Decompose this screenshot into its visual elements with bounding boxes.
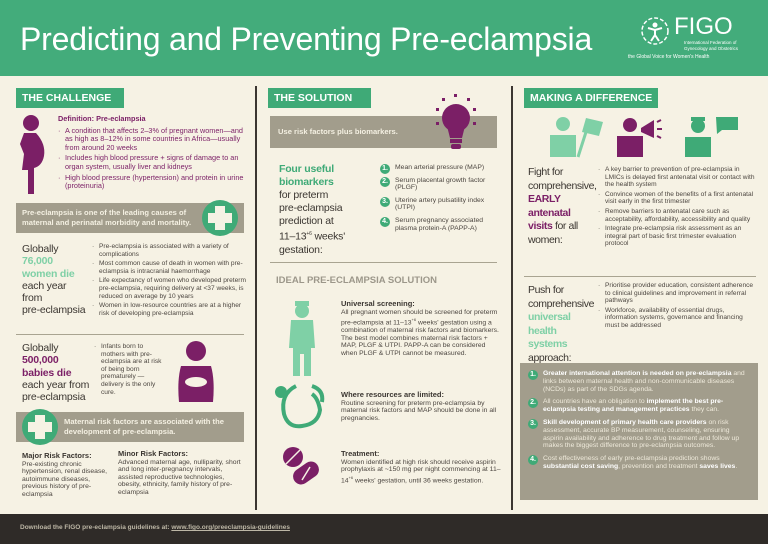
icon: lightbulb (436, 94, 476, 149)
heading: the challenge: THE CHALLENGE (22, 92, 111, 104)
title: Predicting and Preventing Pre-eclampsia (20, 21, 592, 57)
list: biomarkers: Serum pregnancy associated plasma protein-A (PAPP-A) (395, 217, 483, 232)
FIGO logo (628, 13, 738, 60)
bullets: health systems: Prioritise provider education, consistent adherence to clinical guidelines and improvement in referral pathways (605, 282, 753, 304)
heading: the solution: THE SOLUTION (274, 92, 352, 104)
definition text: Definition: Pre-eclampsia (58, 114, 146, 123)
stat: 76,000 women: each year (22, 280, 66, 292)
definition text (58, 114, 244, 190)
box: recommendations: Cost effectiveness of early pre-eclampsia prediction shows substantial cost saving, prevention and treatment saves lives. (543, 455, 737, 470)
panel: making a difference (520, 88, 758, 500)
panel: the solution (268, 88, 501, 484)
box: recommendations: Greater international attention is needed on pre-eclampsia and links between maternal health and non-communicable diseases (NCDs) as part of the SDGs agenda. (543, 370, 745, 393)
bullets: complications: Women in low-resource countries are at a higher risk of developing pre-eclampsia (99, 302, 241, 317)
icon: green cross (202, 200, 238, 236)
text: four useful biomarkers: biomarkers (279, 176, 334, 188)
definition text: A condition that affects 2–3% of pregnant women—and as high as 8–12% in some countries in Africa—usually from around 20 weeks (65, 126, 243, 152)
list: biomarkers: 4. (382, 218, 388, 225)
text: fight for early antenatal visits: women: (528, 234, 562, 246)
stat: 76,000 women: women die (22, 268, 74, 280)
box: recommendations (520, 363, 758, 500)
FIGO logo: the Global Voice for Women's Health (628, 54, 709, 60)
major risk factors: Pre-existing chronic hypertension, renal disease, autoimmune diseases, previous history of pre-eclampsia (22, 461, 107, 498)
text: four useful biomarkers: gestation: (279, 244, 323, 256)
bullets: infants: Infants born to mothers with pre-eclampsia are at risk of being born prematurely — delivery is the only cure. (101, 343, 161, 396)
list: biomarkers: 1. (382, 165, 388, 172)
bullets: antenatal: A key barrier to prevention of pre-eclampsia in LMICs is delayed first antenatal visit or contact with the health system (605, 166, 755, 188)
panel: the challenge (16, 88, 246, 498)
heading: making a difference: MAKING A DIFFERENCE (530, 92, 652, 104)
text: universal health systems: approach: (528, 352, 571, 364)
icon: pregnant woman (20, 115, 44, 194)
text: fight for early antenatal visits (528, 166, 597, 246)
stat: 500,000 babies (22, 342, 89, 403)
text: treatment: Women identified at high risk should receive aspirin prophylaxis at ~150 mg per night commencing at 11–14+6 weeks' gestation, until 36 weeks gestation. (341, 459, 501, 484)
callout band: leading causes (16, 203, 244, 233)
heading: the challenge (16, 88, 124, 108)
text: four useful biomarkers: prediction at (279, 215, 334, 227)
text: fight for early antenatal visits: Fight for (528, 166, 563, 178)
bullets: antenatal: Convince women of the benefits of a first antenatal visit early in the first trimester (605, 191, 753, 205)
text: four useful biomarkers: 11–13+6 weeks' (279, 230, 345, 242)
stat: 76,000 women (22, 243, 86, 316)
header banner (0, 0, 768, 76)
text: universal screening: Universal screening: (341, 299, 415, 308)
icon: mother with baby (178, 341, 214, 402)
icon: stethoscope (275, 384, 324, 428)
text: universal health systems: health (528, 324, 557, 336)
heading: ideal solution: IDEAL PRE-ECLAMPSIA SOLUTION (276, 275, 437, 286)
list: biomarkers: 2. (382, 178, 388, 185)
text: four useful biomarkers: Four useful (279, 163, 334, 175)
FIGO logo: FIGO (674, 13, 733, 40)
text: where resources are limited (341, 390, 496, 422)
stat: 500,000 babies: pre-eclampsia (22, 391, 85, 403)
bullets: antenatal: Integrate pre-eclampsia risk assessment as an integral part of basic first trimester evaluation protocol (605, 225, 741, 247)
callout band: maternal risk factors: Maternal risk factors are associated with the development of pre-eclampsia. (64, 417, 224, 436)
bullets: complications (92, 243, 246, 317)
heading: the solution (268, 88, 371, 108)
text: universal health systems: universal (528, 311, 571, 323)
stat: 500,000 babies: 500,000 (22, 354, 59, 366)
list: biomarkers (380, 164, 486, 232)
bullets: health systems: Workforce, availability of essential drugs, information systems, governance and financing must be addressed (605, 307, 743, 329)
text: fight for early antenatal visits: comprehensive, (528, 180, 597, 192)
callout band: maternal risk factors (16, 412, 244, 442)
band: risk factors plus biomarkers (270, 116, 497, 148)
stat: 500,000 babies: each year from (22, 379, 89, 391)
text: universal health systems: systems (528, 338, 567, 350)
list: biomarkers: 3. (382, 198, 388, 205)
box: recommendations: Skill development of primary health care providers on risk assessment, accurate BP measurement, counseling, ensuring aspirin availability and adherence to drug treatment and follow up makes the biggest difference to pre-eclampsia outcomes. (543, 419, 739, 449)
minor risk factors: Advanced maternal age, nulliparity, short and long inter-pregnancy intervals, assisted reproductive technologies, obesity, ethnicity, family history of pre-eclampsia (118, 459, 241, 496)
definition text: High blood pressure (hypertension) and protein in urine (proteinuria) (65, 173, 243, 190)
footer (0, 514, 768, 544)
definition text: Includes high blood pressure + signs of damage to an organ system, usually liver and kidneys (65, 153, 238, 171)
text: fight for early antenatal visits: EARLY (528, 193, 561, 205)
text: treatment: Treatment: (341, 449, 379, 458)
list: biomarkers: Mean arterial pressure (MAP) (395, 164, 484, 171)
bullets: antenatal: Remove barriers to antenatal care such as acceptability, affordability, accessibility and quality (605, 208, 750, 223)
box: recommendations: 1. (530, 371, 536, 378)
stat: 76,000 women: 76,000 (22, 255, 53, 267)
icon: green cross 2 (22, 409, 58, 445)
stat: 76,000 women: from (22, 292, 42, 304)
stat: 500,000 babies: babies die (22, 367, 71, 379)
heading: making a difference (524, 88, 658, 108)
minor risk factors: Minor Risk Factors: (118, 449, 188, 458)
callout band: leading causes: Pre-eclampsia is one of the leading causes of maternal and perinatal morbidity and mortality. (22, 208, 191, 227)
major risk factors: Major Risk Factors: (22, 451, 92, 460)
icon: pills (283, 447, 319, 484)
icon: health worker (289, 301, 315, 376)
text: four useful biomarkers: pre-eclampsia (279, 202, 342, 214)
text: fight for early antenatal visits: antenatal (528, 206, 570, 218)
bullets: complications: Most common cause of death in women with pre-eclampsia is intracranial haemorrhage (99, 260, 243, 275)
text: universal health systems (528, 284, 594, 364)
list: biomarkers: Serum placental growth factor (PLGF) (395, 177, 485, 191)
list: biomarkers: Uterine artery pulsatility index (UTPI) (395, 197, 484, 211)
footer text: Download the FIGO pre-eclampsia guidelines at: www.figo.org/preeclampsia-guidelines (20, 524, 290, 531)
band: risk factors plus biomarkers: Use risk factors plus biomarkers. (278, 127, 398, 136)
stat: 76,000 women: pre-eclampsia (22, 304, 85, 316)
text: where resources are limited: Routine screening for preterm pre-eclampsia by maternal risk factors and MAP should be done in all pregnancies. (341, 400, 496, 422)
bullets: complications: Life expectancy of women who developed preterm pre-eclampsia, requiring delivery at <37 weeks, is reduced on average by 10 years (99, 277, 246, 300)
text: universal health systems: Push for (528, 284, 564, 296)
bullets: antenatal (598, 166, 755, 247)
FIGO logo: International Federation of Gynecology and Obstetrics (684, 40, 738, 50)
text: four useful biomarkers: for preterm (279, 189, 328, 201)
bullets: health systems (598, 282, 753, 329)
text: universal screening: All pregnant women should be screened for preterm pre-eclampsia at 11–13+6 weeks' gestation using a combination of maternal risk factors and biomarkers. The best model combines maternal risk factors + MAP, PLGF & UTPI. PAPP-A can be considered when PLGF & UTPI cannot be measured. (341, 309, 499, 357)
bullets: complications: Pre-eclampsia is associated with a variety of complications (99, 243, 229, 258)
box: recommendations: 4. (530, 456, 536, 463)
icons: advocacy people (550, 117, 738, 158)
box: recommendations: All countries have an obligation to implement the best pre-eclampsia testing and management practices they can. (543, 398, 723, 413)
text: where resources are limited: Where resources are limited: (341, 390, 444, 399)
text: four useful biomarkers (279, 163, 345, 256)
stat: 500,000 babies: Globally (22, 342, 58, 354)
stat: 76,000 women: Globally (22, 243, 58, 255)
text: universal health systems: comprehensive (528, 298, 594, 310)
text: fight for early antenatal visits: visits for all (528, 220, 578, 232)
box: recommendations: 3. (530, 420, 536, 427)
box: recommendations: 2. (530, 399, 536, 406)
